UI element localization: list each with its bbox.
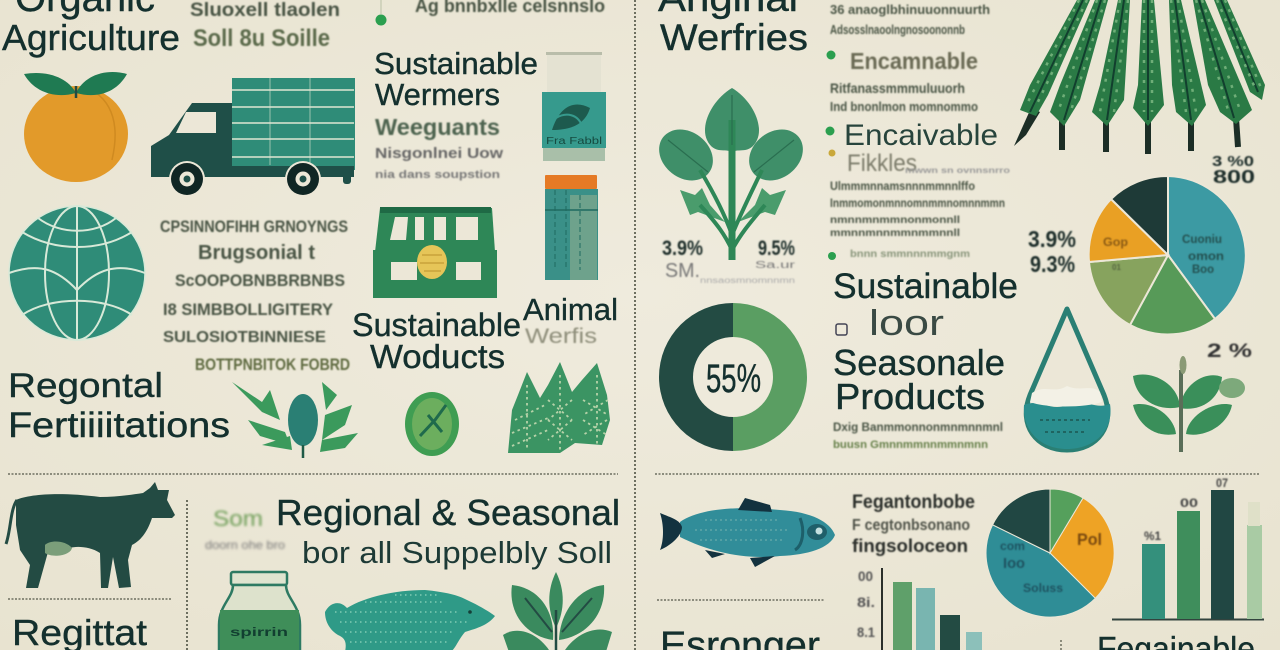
text block: products detail <box>833 420 1003 451</box>
heading: sustainable wermers: Sustainable <box>374 46 538 81</box>
text block: globe description <box>160 217 350 374</box>
heading: sustainable wermers: Wermers <box>375 77 500 112</box>
pie chart: upper right: Gop <box>1103 235 1128 249</box>
heading: regional and seasonal: Regional & Seasonal <box>276 492 620 533</box>
stat labels: plant <box>662 237 796 285</box>
text block: fine lines: Inmmomonmnnomnmmnomnnmmn <box>830 196 1005 210</box>
stat labels: plant: 9.5% <box>758 237 795 260</box>
pie labels: 3 %0 <box>1212 153 1254 170</box>
title: animal welfare: Werfries <box>660 17 808 58</box>
heading: encaivable fikkles: Fikkles <box>847 150 917 177</box>
pie labels <box>1028 153 1255 277</box>
text: som label <box>205 506 285 552</box>
bullet: green 3 <box>828 252 836 260</box>
bar chart: lower right: %1 <box>1144 529 1161 543</box>
text block: top right centre: Ritfanassmmmuluuorh <box>830 80 965 96</box>
text block: products detail: buusn Gmnnmmnnmmnmnn <box>833 439 988 451</box>
heading: regional fertilisations: Regontal <box>8 367 163 405</box>
icon: herb sprigs <box>232 382 358 458</box>
pie chart: upper right: Cuoniu <box>1182 232 1222 246</box>
text block: wermers detail: nia dans soupstion <box>375 169 500 181</box>
stat labels: plant: nnsaosmnomnnmn <box>700 276 795 285</box>
bar chart: lower right: 07 <box>1216 476 1228 490</box>
donut chart: 55 percent <box>659 303 807 451</box>
text block: soil subheading <box>190 0 340 52</box>
text block: fish description: F cegtonbsonano <box>852 517 970 534</box>
text: som label: doorn ohe bro <box>205 538 285 552</box>
bar chart: lower left: 00 <box>858 568 873 584</box>
heading: sustainable woducts <box>352 307 521 375</box>
bar chart: lower left <box>857 568 982 650</box>
heading: animal werfis: Animal <box>523 292 618 327</box>
icon: leaf plant <box>503 572 612 650</box>
heading: encaivable fikkles: Encaivable <box>844 119 998 152</box>
icon: delivery truck <box>151 78 355 197</box>
icon: carton bottle <box>542 52 606 161</box>
heading: sustainable seasonal products: Seasonale <box>833 342 1005 383</box>
icon: globe <box>9 206 145 340</box>
heading: animal werfis: Werfis <box>525 325 597 348</box>
icon: plant <box>649 88 813 260</box>
heading: sustainable wermers <box>374 46 538 112</box>
text block: soil subheading: Sluoxell tlaolen <box>190 0 340 21</box>
text block: globe description: Brugsonial t <box>198 242 315 264</box>
bar chart: lower right: 00 <box>1180 496 1198 510</box>
heading: sustainable woducts: Sustainable <box>352 307 521 343</box>
text block: fish description <box>852 492 975 556</box>
icon: leaf cluster <box>508 362 610 453</box>
donut chart: 55 percent: 55% <box>706 357 761 401</box>
text block: fine lines: Ulmmmnnamsnnnmmnnlffo <box>830 179 975 193</box>
heading: sustainable woducts: Woducts <box>370 338 505 375</box>
text block: fine lines: mwwn sn ovnnsnrro <box>905 166 1010 175</box>
title: organic agriculture: Agriculture <box>2 17 180 58</box>
pie chart: upper right: omon <box>1188 249 1224 263</box>
icon: crop rows <box>1014 0 1265 154</box>
icon: carton bottle: Fra Fabbl <box>546 136 602 147</box>
text block: fish description: Fegantonbobe <box>852 492 975 513</box>
text block: fine lines: nmnnmnmmnonmonnll <box>830 215 960 226</box>
text block: globe description: BOTTPNBITOK FOBRD <box>195 355 350 374</box>
text block: fine lines <box>830 166 1010 260</box>
pie labels: 9.3% <box>1030 251 1075 277</box>
text block: top right centre: Encamnable <box>850 48 978 74</box>
pie labels: 3.9% <box>1028 226 1076 252</box>
icon: supplement box <box>545 175 598 280</box>
bullet: green <box>826 50 836 60</box>
text block: soil subheading: Soll 8u Soille <box>193 25 330 52</box>
heading: sustainable seasonal products: Products <box>835 376 985 417</box>
text block: globe description: I8 SIMBBOLLIGITERY <box>163 300 334 319</box>
heading: regional and seasonal <box>276 492 620 570</box>
text block: products detail: Dxig Banmmonnonmnmnnmnl <box>833 420 1003 434</box>
icon: teal animal <box>325 590 495 650</box>
pie chart: lower centre: Ioo <box>1003 555 1025 572</box>
text block: globe description: ScOOPOBNBBRBNBS <box>175 271 345 290</box>
icon: produce crate <box>373 207 497 298</box>
title: animal welfare <box>658 0 808 58</box>
pie chart: upper right: Boo <box>1192 262 1214 276</box>
text block: top right centre <box>830 2 990 114</box>
icon: water bag <box>1024 309 1111 450</box>
text: som label: Som <box>213 506 263 531</box>
text block: fine lines: mmnnmnnmmnmmnnll <box>830 228 960 239</box>
heading: sustainable seasonal products: loor <box>869 302 944 343</box>
bar chart: lower right <box>1112 476 1264 620</box>
text block: globe description: CPSINNOFIHH GRNOYNGS <box>160 217 348 236</box>
pie chart: upper right <box>1089 176 1246 334</box>
stat labels: plant: SM. <box>665 260 700 282</box>
heading: regional fertilisations: Fertiiiitations <box>8 406 230 445</box>
heading: regional fertilisations <box>8 367 230 445</box>
bullet: amber <box>828 150 836 156</box>
text block: wermers detail <box>375 114 503 181</box>
pie chart: lower centre: Soluss <box>1023 581 1063 595</box>
icon: orange <box>24 72 128 182</box>
pie chart: lower centre <box>986 489 1114 617</box>
heading: sustainable seasonal products <box>833 267 1018 417</box>
stat label: 2 percent: 2 % <box>1207 341 1252 362</box>
pie chart: lower centre: com <box>1000 539 1025 553</box>
icon: glass jar <box>219 572 300 650</box>
bullet: green 2 <box>826 126 834 136</box>
text block: fine lines: bnnn smmnnnmmgnm <box>850 249 970 260</box>
icon: seedling <box>1133 356 1245 452</box>
text block: top right centre: Adsosslnaoolngnosoononnb <box>830 22 965 37</box>
bar chart: lower left: 8.1 <box>857 624 875 640</box>
heading: regional and seasonal: bor all Suppelbly Soll <box>302 535 612 570</box>
heading: sustainable seasonal products: Sustainable <box>833 267 1018 306</box>
icon: fish <box>660 498 835 567</box>
heading: encaivable fikkles <box>844 119 998 177</box>
icon: cow <box>6 482 175 588</box>
stat labels: plant: Sa.ur <box>755 260 796 271</box>
text block: wermers detail: Weeguants <box>375 114 500 140</box>
pie chart: lower centre: Pol <box>1077 530 1102 549</box>
icon: glass jar: spirrin <box>230 625 288 639</box>
text block: top right centre: Ind bnonlmon momnommo <box>830 99 978 114</box>
title: organic agriculture <box>2 0 180 58</box>
stat labels: plant: 3.9% <box>662 237 703 260</box>
text block: wermers detail: Nisgonlnei Uow <box>375 145 503 162</box>
pie labels: 800 <box>1213 167 1255 187</box>
heading: animal werfis <box>523 292 618 348</box>
text block: globe description: SULOSIOTBINNIESE <box>163 329 326 346</box>
bullet: green dot <box>376 0 386 26</box>
text block: top right centre: 36 anaoglbhinuuonnuurth <box>830 2 990 17</box>
text block: fish description: fingsoloceon <box>852 536 968 556</box>
icon: green seed disc <box>405 392 459 456</box>
pie chart: upper right: 01 <box>1112 263 1121 272</box>
bar chart: lower left: 8i. <box>857 594 875 610</box>
